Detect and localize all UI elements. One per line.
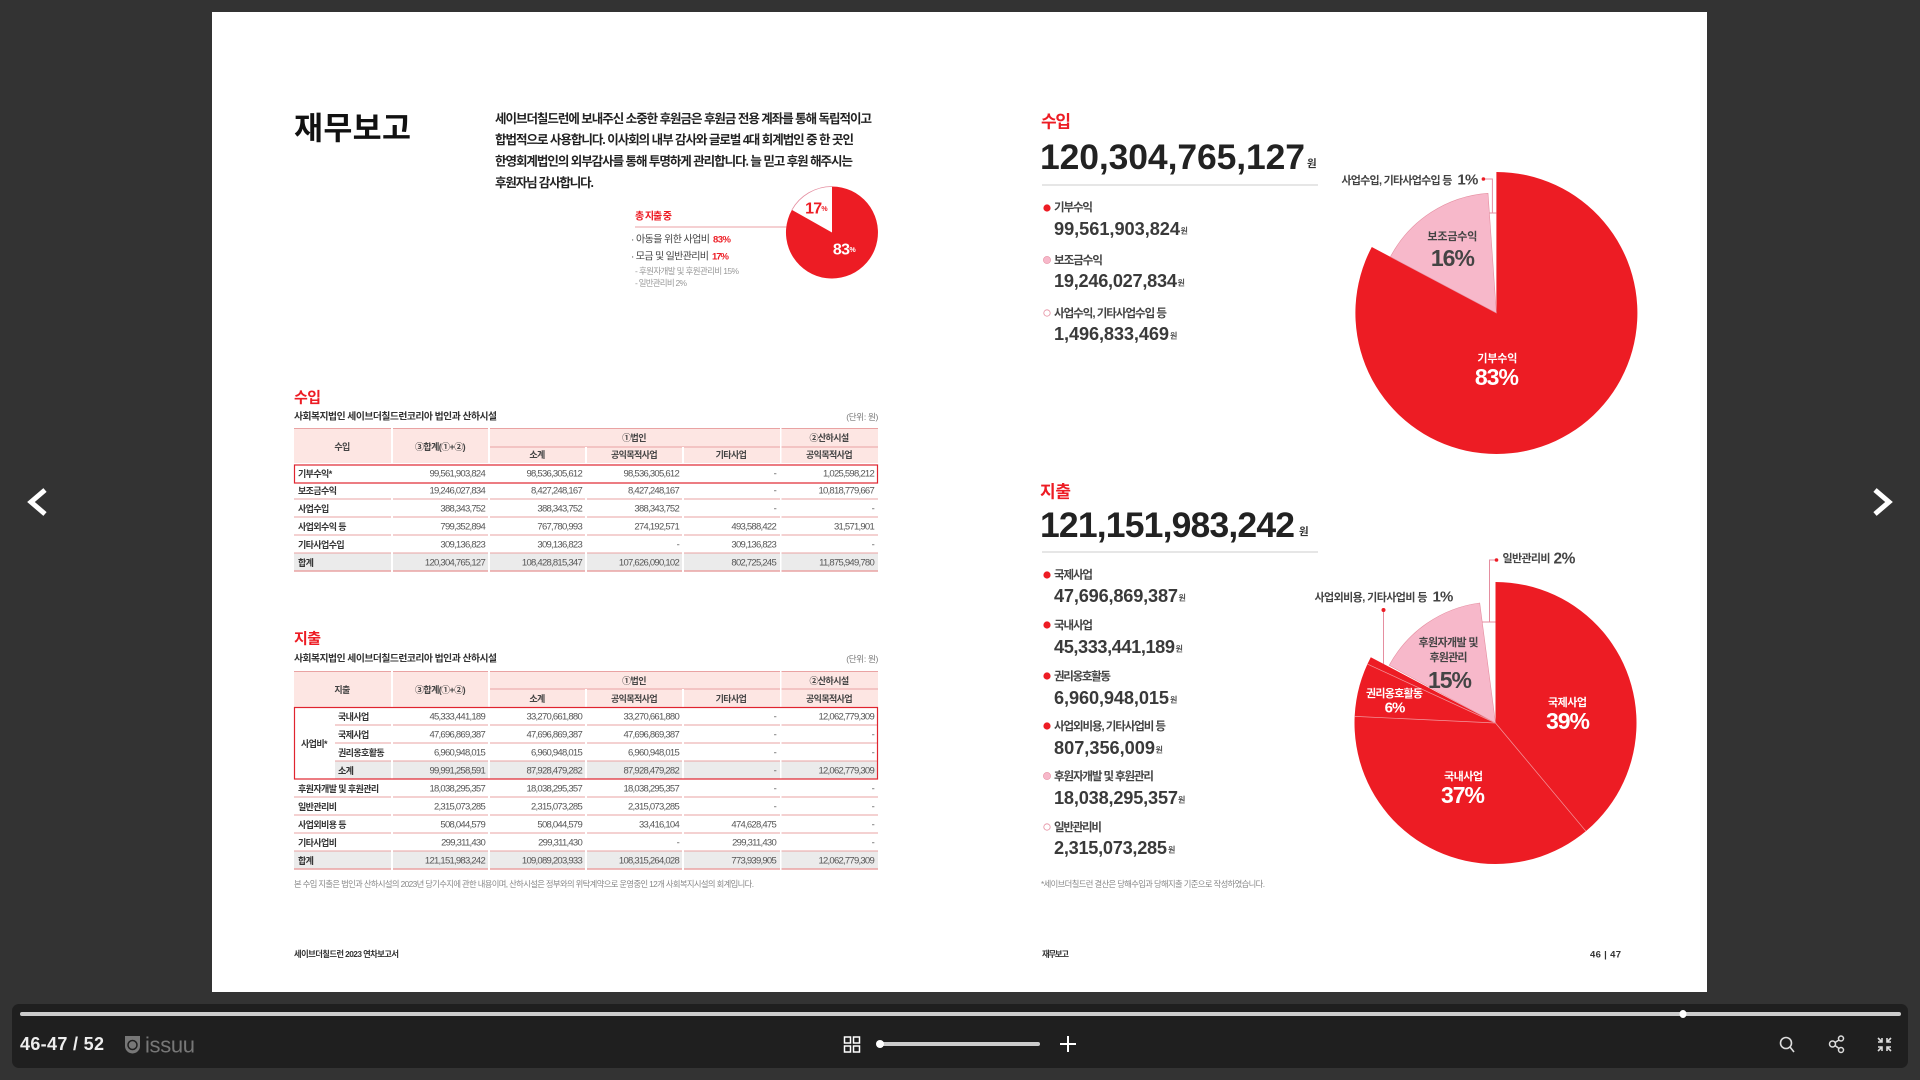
label: domestic <box>1441 769 1485 808</box>
expenditure table unit: (단위: 원) <box>846 654 878 664</box>
income row: subsidies: 8,427,248,167 <box>628 486 679 496</box>
expense row: subtotal: 87,928,479,282 <box>526 766 582 776</box>
expenditure table header: 소계 <box>529 693 545 704</box>
icon: plus <box>1060 1036 1076 1052</box>
icon: grid <box>844 1037 860 1052</box>
expenditure table header: 공익목적사업 <box>611 693 657 704</box>
expense row: subtotal <box>338 765 874 776</box>
income item: subsidies: 보조금수익 <box>1054 254 1103 267</box>
income pie chart <box>1341 172 1637 454</box>
expense row: subtotal: 87,928,479,282 <box>623 766 679 776</box>
expense item: admin: 일반관리비 <box>1054 820 1102 834</box>
income item: subsidies: 19,246,027,834 <box>1054 271 1178 291</box>
expense row: advocacy: 권리옹호활동 <box>338 747 384 758</box>
income row: non-operating: 767,780,993 <box>537 522 582 532</box>
expense item: non-operating: 807,356,009 <box>1054 738 1155 758</box>
income row: non-operating: 274,192,571 <box>634 522 679 532</box>
expense item: advocacy: 권리옹호활동 <box>1054 669 1111 683</box>
expense row: admin: 일반관리비 <box>298 801 337 812</box>
label: admin <box>1502 550 1576 568</box>
expense row: subtotal: 99,991,258,591 <box>429 766 485 776</box>
mini pie chart: 17% <box>805 200 828 218</box>
income row: subsidies: 10,818,779,667 <box>818 486 874 496</box>
summary list: 83% <box>713 234 732 246</box>
income table header: 소계 <box>529 449 545 460</box>
leader: other income <box>1482 177 1496 213</box>
expenditure table subtitle: 사회복지법인 세이브더칠드런코리아 법인과 산하시설 <box>294 652 497 664</box>
expenditure table header: 기타사업 <box>716 693 747 704</box>
label: fundraising: 후원관리 <box>1430 650 1468 664</box>
expense row: total: 773,939,905 <box>731 856 776 866</box>
expense item: domestic: 45,333,441,189 <box>1054 637 1175 657</box>
expense item: fundraising: 원 <box>1178 794 1185 804</box>
zoom slider <box>876 1040 1040 1048</box>
expense row: total: 108,315,264,028 <box>619 856 679 866</box>
summary list <box>631 232 739 288</box>
income row: other: 309,136,823 <box>537 540 582 550</box>
income row: business: 388,343,752 <box>634 504 679 514</box>
expense item: international: 원 <box>1178 592 1186 602</box>
expense row: admin: 2,315,073,285 <box>434 802 485 812</box>
income row: donations: 98,536,305,612 <box>623 468 679 480</box>
intro paragraph <box>495 111 872 190</box>
expense row: other: 299,311,430 <box>538 838 582 848</box>
expense row: advocacy: - <box>872 748 875 758</box>
expenditure table header: 공익목적사업 <box>806 693 852 704</box>
income row: other: 309,136,823 <box>440 540 485 550</box>
expense row: other <box>298 837 875 848</box>
income row: non-operating: 493,588,422 <box>731 522 776 532</box>
label: advocacy: 권리옹호활동 <box>1366 686 1423 700</box>
expense row: non-operating: 508,044,579 <box>440 820 485 830</box>
income item: other: 1,496,833,469 <box>1054 324 1169 344</box>
income row: other: 기타사업수입 <box>298 539 344 550</box>
footer: report name: 세이브더칠드런 2023 연차보고서 <box>294 949 399 959</box>
label: admin: 일반관리비 <box>1502 551 1550 565</box>
label: advocacy: 6% <box>1385 700 1405 716</box>
summary list: - 후원자개발 및 후원관리비 15% <box>635 266 739 276</box>
expenditure pie chart <box>1314 550 1637 864</box>
income row: donations: 기부수익* <box>298 468 333 479</box>
income table unit: (단위: 원) <box>846 412 878 422</box>
income item: subsidies <box>1043 254 1185 291</box>
income row: subsidies: 19,246,027,834 <box>429 486 485 496</box>
intro paragraph: 합법적으로 사용합니다. 이사회의 내부 감사와 글로벌 4대 회계법인 중 한 곳인 <box>495 132 854 147</box>
income row: total: 120,304,765,127 <box>425 558 485 568</box>
income table header: 수입 <box>334 441 350 452</box>
expense row: admin: - <box>774 802 777 812</box>
income item: donations: 99,561,903,824 <box>1054 219 1181 239</box>
expense row: fundraising: 후원자개발 및 후원관리 <box>298 783 379 794</box>
income table subtitle: 사회복지법인 세이브더칠드런코리아 법인과 산하시설 <box>294 410 497 422</box>
icon: fullscreen <box>1878 1038 1891 1051</box>
expense item: non-operating: 사업외비용, 기타사업비 등 <box>1054 719 1166 733</box>
expense row: advocacy: 6,960,948,015 <box>531 748 582 758</box>
right footnote: *세이브더칠드런 결산은 당해수입과 당해지출 기준으로 작성하였습니다. <box>1041 879 1265 889</box>
expense row: fundraising <box>298 783 875 794</box>
label: other income: 사업수입, 기타사업수입 등 <box>1341 173 1452 187</box>
income row: total: 802,725,245 <box>731 558 776 568</box>
label: donations <box>1475 351 1518 390</box>
expense row: international: 47,696,869,387 <box>526 730 582 740</box>
expenditure total: 원 <box>1299 525 1309 538</box>
footer: section name: 재무보고 <box>1042 949 1069 959</box>
expenditure table heading: 지출 <box>294 630 321 648</box>
income row: business: 388,343,752 <box>537 504 582 514</box>
expense item: international <box>1043 568 1186 606</box>
income row: business: 388,343,752 <box>440 504 485 514</box>
income row: other: - <box>677 540 680 550</box>
issuu logo: issuu <box>145 1032 195 1058</box>
expense row: total: 109,089,203,933 <box>522 856 582 866</box>
expense row: total <box>298 855 874 866</box>
expense row: international <box>338 729 875 740</box>
icon: search <box>1780 1038 1794 1052</box>
expenditure table header: 지출 <box>334 685 350 695</box>
expense row: total: 12,062,779,309 <box>818 856 874 866</box>
income table header <box>334 432 852 460</box>
summary list: 17% <box>712 252 730 262</box>
expense row: domestic: 국내사업 <box>338 711 369 722</box>
business expense group label: 사업비* <box>301 738 328 749</box>
label: domestic: 37% <box>1441 782 1485 808</box>
income row: business <box>298 503 875 514</box>
label: international: 국제사업 <box>1548 695 1587 709</box>
expense row: non-operating: 사업외비용 등 <box>298 819 346 830</box>
expense row: domestic: 45,333,441,189 <box>429 712 485 722</box>
expense row: domestic <box>338 711 874 722</box>
table footnote: 본 수입 지출은 법인과 산하시설의 2023년 당기수지에 관한 내용이며, 산하시설은 정부와의 위탁계약으로 운영중인 12개 사회복지시설의 회계입니다. <box>294 879 754 889</box>
expense row: non-operating: 33,416,104 <box>639 820 679 830</box>
label: other income: 1% <box>1457 172 1478 188</box>
expense row: advocacy: - <box>774 748 777 758</box>
expense item: domestic <box>1043 618 1183 657</box>
income item: other: 사업수익, 기타사업수입 등 <box>1054 306 1167 320</box>
income row: business: - <box>774 504 777 514</box>
summary heading: 총 지출 중 <box>635 210 672 222</box>
expense row: domestic: - <box>774 712 777 722</box>
footer: page numbers: 46 | 47 <box>1590 950 1621 960</box>
expense item: advocacy: 원 <box>1170 694 1177 704</box>
expense row: international: 47,696,869,387 <box>623 730 679 740</box>
expense row: non-operating: - <box>872 820 875 830</box>
expense row: fundraising: 18,038,295,357 <box>526 784 582 794</box>
expense item: international: 47,696,869,387 <box>1054 586 1178 606</box>
income row: total <box>298 557 874 568</box>
panel: total expenditure summary <box>631 186 878 288</box>
summary list: · 아동을 위한 사업비 <box>631 232 710 246</box>
icon: next arrow <box>1875 490 1889 514</box>
income row: subsidies: 8,427,248,167 <box>531 486 582 496</box>
label: domestic: 국내사업 <box>1444 769 1483 783</box>
income row: non-operating <box>298 521 874 532</box>
expense item: fundraising <box>1043 769 1185 808</box>
expenditure table header <box>334 675 852 704</box>
expense row: subtotal: 12,062,779,309 <box>818 766 874 776</box>
progress bar <box>20 1010 1901 1018</box>
income row: non-operating: 31,571,901 <box>834 522 874 532</box>
label: donations: 기부수익 <box>1477 351 1517 365</box>
panel: income table <box>294 390 878 572</box>
income row: donations: 98,536,305,612 <box>526 468 582 480</box>
income heading: 수입 <box>1041 112 1071 132</box>
expense row: fundraising: 18,038,295,357 <box>429 784 485 794</box>
intro paragraph: 후원자님 감사합니다. <box>495 175 594 190</box>
expense row: non-operating: 474,628,475 <box>731 820 776 830</box>
mini pie chart <box>786 186 878 278</box>
label: international <box>1546 695 1590 734</box>
expenditure table header: ③합계(①+②) <box>415 684 466 695</box>
expenditure total: 121,151,983,242 <box>1040 505 1295 545</box>
expenditure table header: ①법인 <box>622 675 646 686</box>
expense item: fundraising: 후원자개발 및 후원관리 <box>1054 769 1154 783</box>
income total: 120,304,765,127 <box>1040 137 1305 177</box>
expense item: non-operating: 원 <box>1156 744 1163 754</box>
icon: share <box>1830 1036 1844 1052</box>
label: other income <box>1341 172 1478 188</box>
label: non-operating <box>1314 588 1453 606</box>
income item: other: 원 <box>1170 330 1177 340</box>
summary list: · 모금 및 일반관리비 <box>631 250 709 262</box>
income row: donations: 99,561,903,824 <box>429 468 485 480</box>
income table header: ③합계(①+②) <box>415 441 466 452</box>
income row: donations: - <box>774 468 777 480</box>
income total: 원 <box>1307 157 1317 170</box>
income row: other: 309,136,823 <box>731 540 776 550</box>
income row: subsidies: - <box>774 486 777 496</box>
income row: subsidies: 보조금수익 <box>298 485 337 496</box>
label: subsidies: 16% <box>1431 245 1474 271</box>
viewer toolbar <box>12 1004 1908 1068</box>
expense item: fundraising: 18,038,295,357 <box>1054 788 1178 808</box>
expense row: domestic: 33,270,661,880 <box>526 712 582 722</box>
expense row: other: 기타사업비 <box>298 837 337 848</box>
summary list: - 일반관리비 2% <box>635 278 687 288</box>
expense row: other: - <box>677 838 680 848</box>
expense row: subtotal: - <box>774 766 777 776</box>
panel: expenditure table <box>294 630 878 870</box>
income row: non-operating: 사업외수익 등 <box>298 521 346 532</box>
income item: donations: 원 <box>1180 226 1188 236</box>
expense row: admin: 2,315,073,285 <box>628 802 679 812</box>
income row: total: 108,428,815,347 <box>522 558 582 568</box>
expense row: admin <box>298 801 875 812</box>
income row: business: - <box>872 504 875 514</box>
expense row: non-operating <box>298 819 875 830</box>
income row: total: 합계 <box>298 557 314 568</box>
intro paragraph: 한영회계법인의 외부감사를 통해 투명하게 관리합니다. 늘 믿고 후원 해주시는 <box>495 154 853 168</box>
panel: income summary <box>1040 112 1318 344</box>
income table heading: 수입 <box>294 390 321 406</box>
income row: business: 사업수입 <box>298 503 329 514</box>
income row: other <box>298 539 875 550</box>
leader: admin <box>1482 558 1498 622</box>
expense item: admin: 2,315,073,285 <box>1054 838 1167 858</box>
expense row: admin: 2,315,073,285 <box>531 802 582 812</box>
expense row: international: - <box>774 730 777 740</box>
expense row: fundraising: - <box>872 784 875 794</box>
income row: other: - <box>872 540 875 550</box>
expense row: advocacy: 6,960,948,015 <box>628 748 679 758</box>
label: fundraising: 후원자개발 및 <box>1418 635 1478 649</box>
expense row: international: 국제사업 <box>338 729 369 740</box>
expense item: advocacy: 6,960,948,015 <box>1054 688 1169 708</box>
expense row: other: 299,311,430 <box>441 838 485 848</box>
expense row: advocacy <box>338 747 875 758</box>
income item: subsidies: 원 <box>1178 278 1185 288</box>
expense row: international: 47,696,869,387 <box>429 730 485 740</box>
expense row: subtotal: 소계 <box>338 765 354 776</box>
income table header: 기타사업 <box>716 449 747 460</box>
expense row: total: 121,151,983,242 <box>425 856 485 866</box>
label: advocacy <box>1366 686 1423 716</box>
income item: donations <box>1043 200 1188 239</box>
expense row: international: - <box>872 730 875 740</box>
expense row: fundraising: - <box>774 784 777 794</box>
income table header: ①법인 <box>622 432 646 443</box>
leader: non-operating <box>1382 608 1386 664</box>
expense row: other: 299,311,430 <box>732 838 776 848</box>
label: subsidies <box>1427 230 1477 271</box>
label: fundraising <box>1418 635 1478 693</box>
label: non-operating: 사업외비용, 기타사업비 등 <box>1314 590 1428 604</box>
income item: donations: 기부수익 <box>1054 200 1093 214</box>
income row: total: 107,626,090,102 <box>619 558 679 568</box>
expense row: domestic: 12,062,779,309 <box>818 712 874 722</box>
expense item: domestic: 국내사업 <box>1054 618 1093 632</box>
income row: donations: 1,025,598,212 <box>823 468 874 480</box>
expense row: fundraising: 18,038,295,357 <box>623 784 679 794</box>
label: admin: 2% <box>1554 550 1576 568</box>
expense item: admin: 원 <box>1168 844 1175 854</box>
income table header: ②산하시설 <box>809 432 849 443</box>
income table header: 공익목적사업 <box>806 449 852 460</box>
income table header: 공익목적사업 <box>611 449 657 460</box>
income item: other <box>1044 306 1177 344</box>
expense row: admin: - <box>872 802 875 812</box>
expense row: total: 합계 <box>298 855 314 866</box>
expenditure heading: 지출 <box>1040 482 1071 502</box>
page counter: 46-47 / 52 <box>20 1034 104 1054</box>
mini pie chart: 83% <box>833 242 856 258</box>
expenditure table header: ②산하시설 <box>809 675 849 686</box>
title: 재무보고 <box>294 110 411 146</box>
label: fundraising: 15% <box>1428 667 1472 693</box>
expense item: international: 국제사업 <box>1054 568 1093 582</box>
label: subsidies: 보조금수익 <box>1427 230 1477 243</box>
label: international: 39% <box>1546 708 1590 734</box>
income row: non-operating: 799,352,894 <box>440 522 485 532</box>
expense item: domestic: 원 <box>1176 644 1183 654</box>
expense row: advocacy: 6,960,948,015 <box>434 748 485 758</box>
intro paragraph: 세이브더칠드런에 보내주신 소중한 후원금은 후원금 전용 계좌를 통해 독립적이고 <box>495 111 872 126</box>
income row: total: 11,875,949,780 <box>819 558 874 568</box>
icon: previous arrow <box>31 490 45 514</box>
expense row: other: - <box>872 838 875 848</box>
panel: expenditure summary <box>1040 482 1318 858</box>
expense row: non-operating: 508,044,579 <box>537 820 582 830</box>
label: donations: 83% <box>1475 364 1518 390</box>
income row: donations <box>298 468 874 480</box>
income row: subsidies <box>298 485 874 496</box>
label: non-operating: 1% <box>1432 588 1453 606</box>
expense item: admin <box>1044 820 1175 858</box>
expense row: domestic: 33,270,661,880 <box>623 712 679 722</box>
expense item: advocacy <box>1043 669 1177 708</box>
expense item: non-operating <box>1043 719 1166 758</box>
